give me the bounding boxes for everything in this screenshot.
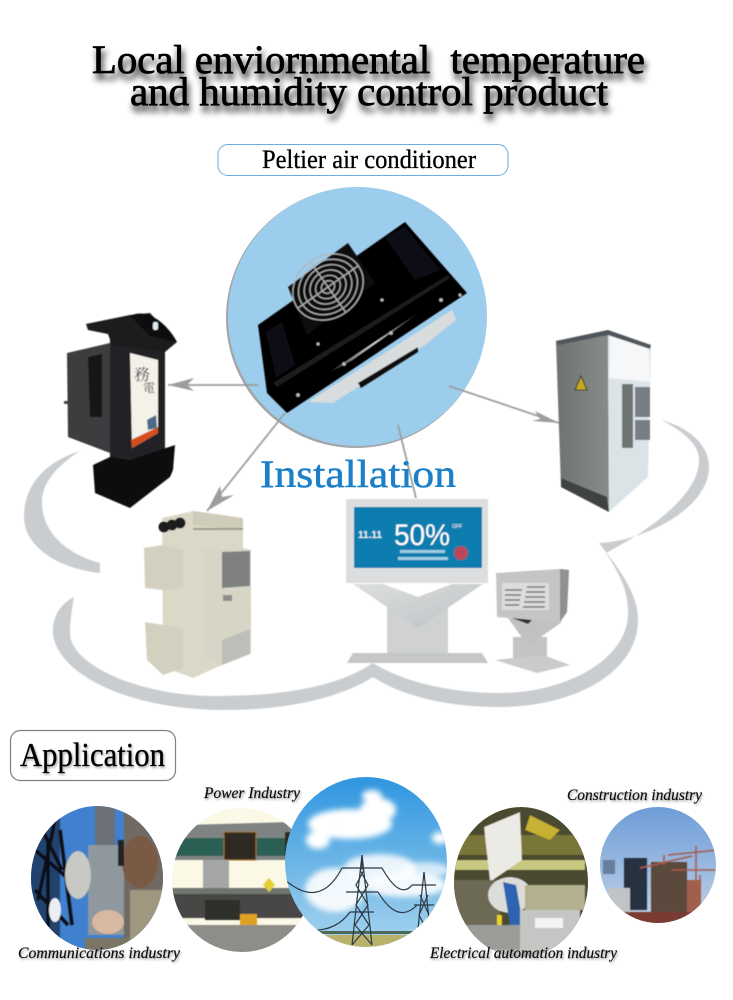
arrows from product to installations bbox=[168, 378, 559, 511]
label: Construction industry: Construction industry bbox=[567, 787, 703, 804]
icon: grey telecom cabinet bbox=[556, 330, 651, 512]
photo: toll station, power industry bbox=[172, 808, 303, 952]
label: Communications industry: Communications industry bbox=[18, 945, 181, 962]
title: and humidity control product bbox=[130, 69, 608, 114]
title bbox=[92, 37, 645, 114]
icon: black advertising kiosk bbox=[64, 313, 177, 508]
icon: beige outdoor cabinet bbox=[144, 511, 251, 678]
icon: white display kiosk: 50% bbox=[394, 519, 450, 552]
icon: white display kiosk: 11.11 bbox=[358, 530, 382, 541]
application heading box bbox=[10, 730, 176, 780]
photo: sky and power pylons bbox=[285, 777, 450, 950]
photo: electrical automation factory bbox=[450, 805, 592, 962]
photo: construction cranes and buildings bbox=[598, 805, 720, 925]
photo: communications industry bbox=[30, 805, 165, 955]
label: Power Industry: Power Industry bbox=[203, 785, 301, 802]
icon: black advertising kiosk: 電 bbox=[143, 381, 155, 395]
label: Electrical automation industry: Electrical automation industry bbox=[429, 945, 618, 962]
heading: Installation: Installation bbox=[260, 453, 456, 496]
icon: black advertising kiosk: 務 bbox=[134, 366, 150, 384]
cloud outline bbox=[24, 420, 709, 710]
subtitle pill: Peltier air conditioner: Peltier air conditioner bbox=[262, 145, 476, 174]
icon: peltier air conditioner unit bbox=[258, 222, 467, 413]
icon: small cabinet stand bbox=[495, 569, 570, 673]
circle behind product bbox=[226, 187, 487, 448]
icon: white display kiosk: OFF bbox=[452, 524, 462, 530]
icon: white display kiosk bbox=[346, 499, 488, 663]
title: Local enviornmental temperature bbox=[92, 37, 645, 82]
application heading box: Application bbox=[20, 737, 165, 774]
